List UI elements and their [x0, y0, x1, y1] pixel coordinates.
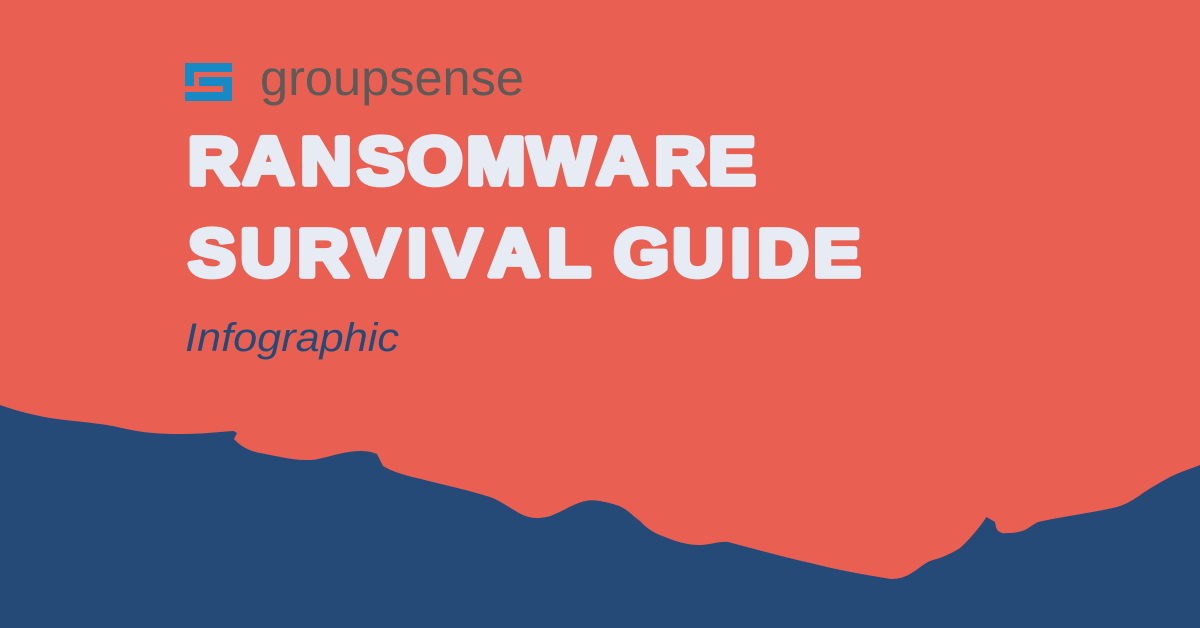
logo: groupsense [185, 50, 524, 106]
logo wordmark: groupsense [260, 50, 524, 106]
navy wave landscape [0, 405, 1200, 628]
title [188, 123, 861, 291]
icon: groupsense mark [185, 63, 232, 101]
title line 2: SURVIVAL GUIDE [188, 215, 861, 291]
subtitle: Infographic [185, 316, 399, 360]
title line 1: RANSOMWARE [188, 123, 756, 199]
